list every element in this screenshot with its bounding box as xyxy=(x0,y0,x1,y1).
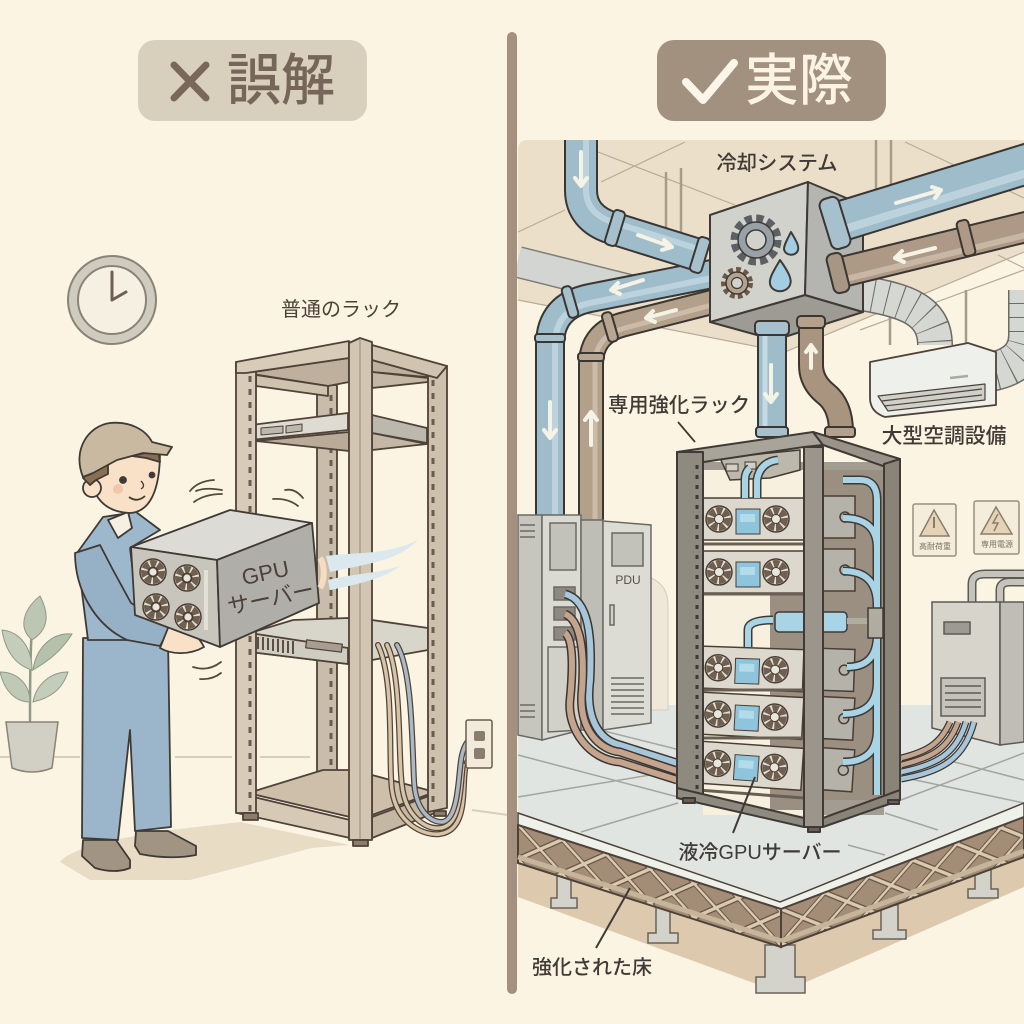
label: 強化された床 xyxy=(532,888,652,979)
front cooling pipes xyxy=(765,163,1024,432)
worker figure xyxy=(75,423,204,871)
wall and floor line xyxy=(0,757,508,815)
worker arm xyxy=(75,545,170,646)
power and coolant floor cables xyxy=(565,594,974,780)
pipe flanges: right and center xyxy=(755,195,976,437)
center divider xyxy=(507,32,517,994)
bottom shelf xyxy=(248,770,350,817)
slab edge xyxy=(518,803,1024,909)
cooling junction box xyxy=(710,182,863,340)
blue return pipe xyxy=(550,274,712,516)
worker shoes xyxy=(82,840,130,871)
cables to wall outlet xyxy=(378,645,476,834)
icon: water drops xyxy=(770,232,798,291)
icon: large gear xyxy=(735,219,777,261)
equipment: chiller unit xyxy=(932,574,1024,745)
GPU server: row 5 xyxy=(695,739,855,794)
GPU server: row 3 xyxy=(697,644,855,693)
coolant tubes xyxy=(745,460,877,795)
rack feet xyxy=(243,811,446,846)
icon: potted plant xyxy=(0,596,72,772)
pipe flanges: left xyxy=(535,209,711,361)
equipment: PDU: PDU xyxy=(615,573,641,587)
GPU server held by worker: GPU xyxy=(239,556,291,590)
warning sign: power: 専用電源 xyxy=(981,539,1013,549)
brown return pipe xyxy=(591,302,712,520)
lower rack shelf with unit xyxy=(250,618,428,664)
floor shadow xyxy=(60,822,350,880)
raised floor platform xyxy=(518,700,1024,993)
equipment: left cabinet xyxy=(518,515,581,740)
motion lines xyxy=(190,480,303,679)
ceiling duct xyxy=(518,262,630,290)
worker hand xyxy=(160,626,204,653)
rear cooling pipes xyxy=(550,140,712,520)
blue supply pipe xyxy=(581,140,705,257)
label: 大型空調設備: 大型空調設備 xyxy=(882,425,1007,448)
manifold xyxy=(775,608,883,638)
air ducts xyxy=(860,290,1024,372)
label: 冷却システム: 冷却システム xyxy=(716,152,838,175)
reinforced rack with liquid-cooled servers xyxy=(677,432,900,832)
heading badge: 実際 xyxy=(657,40,886,121)
floor surface xyxy=(518,700,1024,902)
icon: wall clock xyxy=(68,256,156,344)
left panel: misconception xyxy=(0,40,508,880)
shelves xyxy=(698,544,804,798)
GPU server held by worker: サーバー xyxy=(225,577,316,620)
GPU server: row 2 xyxy=(698,549,855,593)
top controller xyxy=(720,450,800,480)
warning sign: load: 高耐荷重 xyxy=(919,541,951,551)
warning signs xyxy=(913,501,1019,556)
label: 液冷GPUサーバー: 液冷GPUサーバー xyxy=(678,841,842,864)
flow arrows xyxy=(544,152,941,445)
icon: wall outlet xyxy=(466,720,492,768)
center brown pipe xyxy=(811,322,841,432)
ordinary rack xyxy=(236,338,447,846)
equipment: PDU xyxy=(581,520,651,730)
top interior xyxy=(246,358,349,386)
right panel: reality xyxy=(518,40,1024,1024)
brown main pipe xyxy=(838,226,1024,281)
label: 専用強化ラック: 専用強化ラック xyxy=(608,394,750,417)
heading badge: 実際: 実際 xyxy=(745,49,853,112)
top beams xyxy=(236,341,349,373)
worker cap xyxy=(79,423,172,477)
label: 液冷GPUサーバー xyxy=(678,777,842,864)
worker legs xyxy=(82,638,171,840)
front post xyxy=(349,338,372,840)
label: 普通のラック: 普通のラック xyxy=(281,298,401,321)
label: 強化された床: 強化された床 xyxy=(532,956,652,979)
underfloor shadow xyxy=(518,857,1024,993)
GPU server held by worker xyxy=(131,510,324,647)
room background xyxy=(518,140,1024,1024)
rear post xyxy=(317,385,337,772)
lattice band xyxy=(518,825,781,947)
label: 専用強化ラック xyxy=(608,394,750,442)
pale tank behind PDU xyxy=(651,578,668,710)
GPU server: row 4 xyxy=(696,690,855,742)
air conditioner xyxy=(870,343,996,417)
GPU server: row 1 xyxy=(698,496,855,540)
worker torso xyxy=(77,512,170,640)
rack posts xyxy=(236,362,256,813)
upper rack shelf with switch xyxy=(251,413,427,451)
worker head xyxy=(91,440,160,513)
ceiling xyxy=(518,140,1024,352)
icon: small gear xyxy=(724,270,750,296)
heading badge: 誤解 xyxy=(138,40,367,121)
rack frame xyxy=(677,432,900,832)
airflow swoosh xyxy=(326,540,418,590)
heading badge: 誤解: 誤解 xyxy=(227,49,335,112)
center blue pipe xyxy=(765,328,772,432)
floor supports xyxy=(551,868,998,993)
blue main pipe xyxy=(835,163,1024,232)
